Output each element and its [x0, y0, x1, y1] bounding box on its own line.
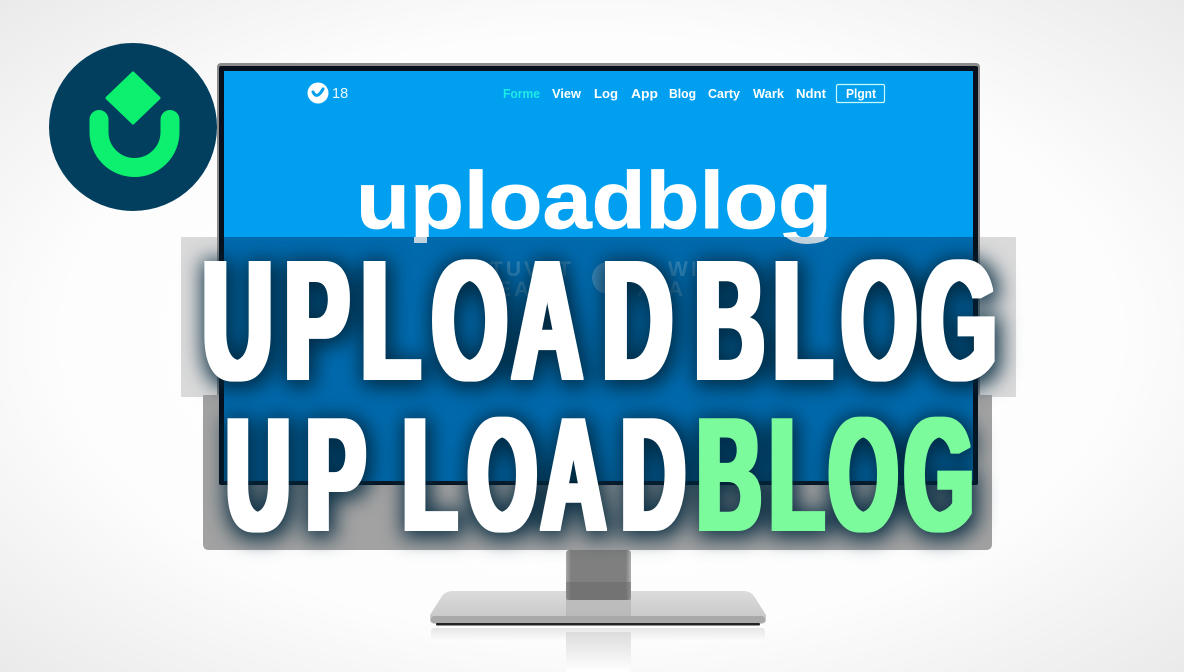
band: lower gray chin of monitor — [203, 395, 992, 550]
nav link: Forme: Forme — [503, 86, 540, 101]
nav link: Log: Log — [594, 86, 618, 101]
monitor stand — [430, 550, 766, 672]
word: BLOG: BLOG — [694, 227, 997, 416]
website wordmark: uploadblog — [356, 156, 832, 246]
word: BLOG in green: BLOG — [697, 384, 973, 565]
faint screen text behind headline: ATA — [637, 278, 686, 301]
logo diamond — [107, 73, 159, 123]
nav link: Carty: Carty — [708, 86, 741, 101]
monitor bezel — [219, 66, 978, 485]
monitor screen — [224, 71, 973, 481]
brand logo badge — [49, 43, 217, 211]
faint screen text behind headline: TUVVT — [490, 258, 574, 281]
band: upper translucent strip behind headline — [181, 237, 1016, 397]
headline line 2 — [226, 384, 973, 565]
word: UP LOAD: UP LOAD — [226, 384, 685, 565]
faint screen text behind headline — [480, 258, 731, 301]
dark overlay panel on screen — [224, 237, 973, 481]
nav link: Wark: Wark — [753, 86, 785, 101]
monitor frame — [217, 63, 980, 488]
site logo number: 18 — [332, 86, 348, 102]
bottom strip of monitor chin — [224, 481, 973, 484]
site logo icon — [308, 82, 328, 104]
logo U shape — [99, 120, 170, 168]
faint screen text behind headline: PEAT — [480, 278, 546, 301]
nav link: Blog: Blog — [669, 86, 696, 101]
nav button: Plgnt — [846, 87, 877, 101]
nav link: View: View — [552, 86, 582, 101]
word: UPLOAD: UPLOAD — [203, 227, 672, 416]
nav link: Ndnt: Ndnt — [796, 86, 827, 101]
wordmark descenders showing through overlay — [414, 237, 829, 244]
headline line 1 — [203, 227, 997, 416]
headline — [203, 227, 997, 565]
nav button — [836, 84, 884, 102]
faint screen text behind headline: WIFT — [668, 258, 731, 281]
nav link: App: App — [631, 86, 658, 101]
website navigation bar — [308, 82, 884, 104]
